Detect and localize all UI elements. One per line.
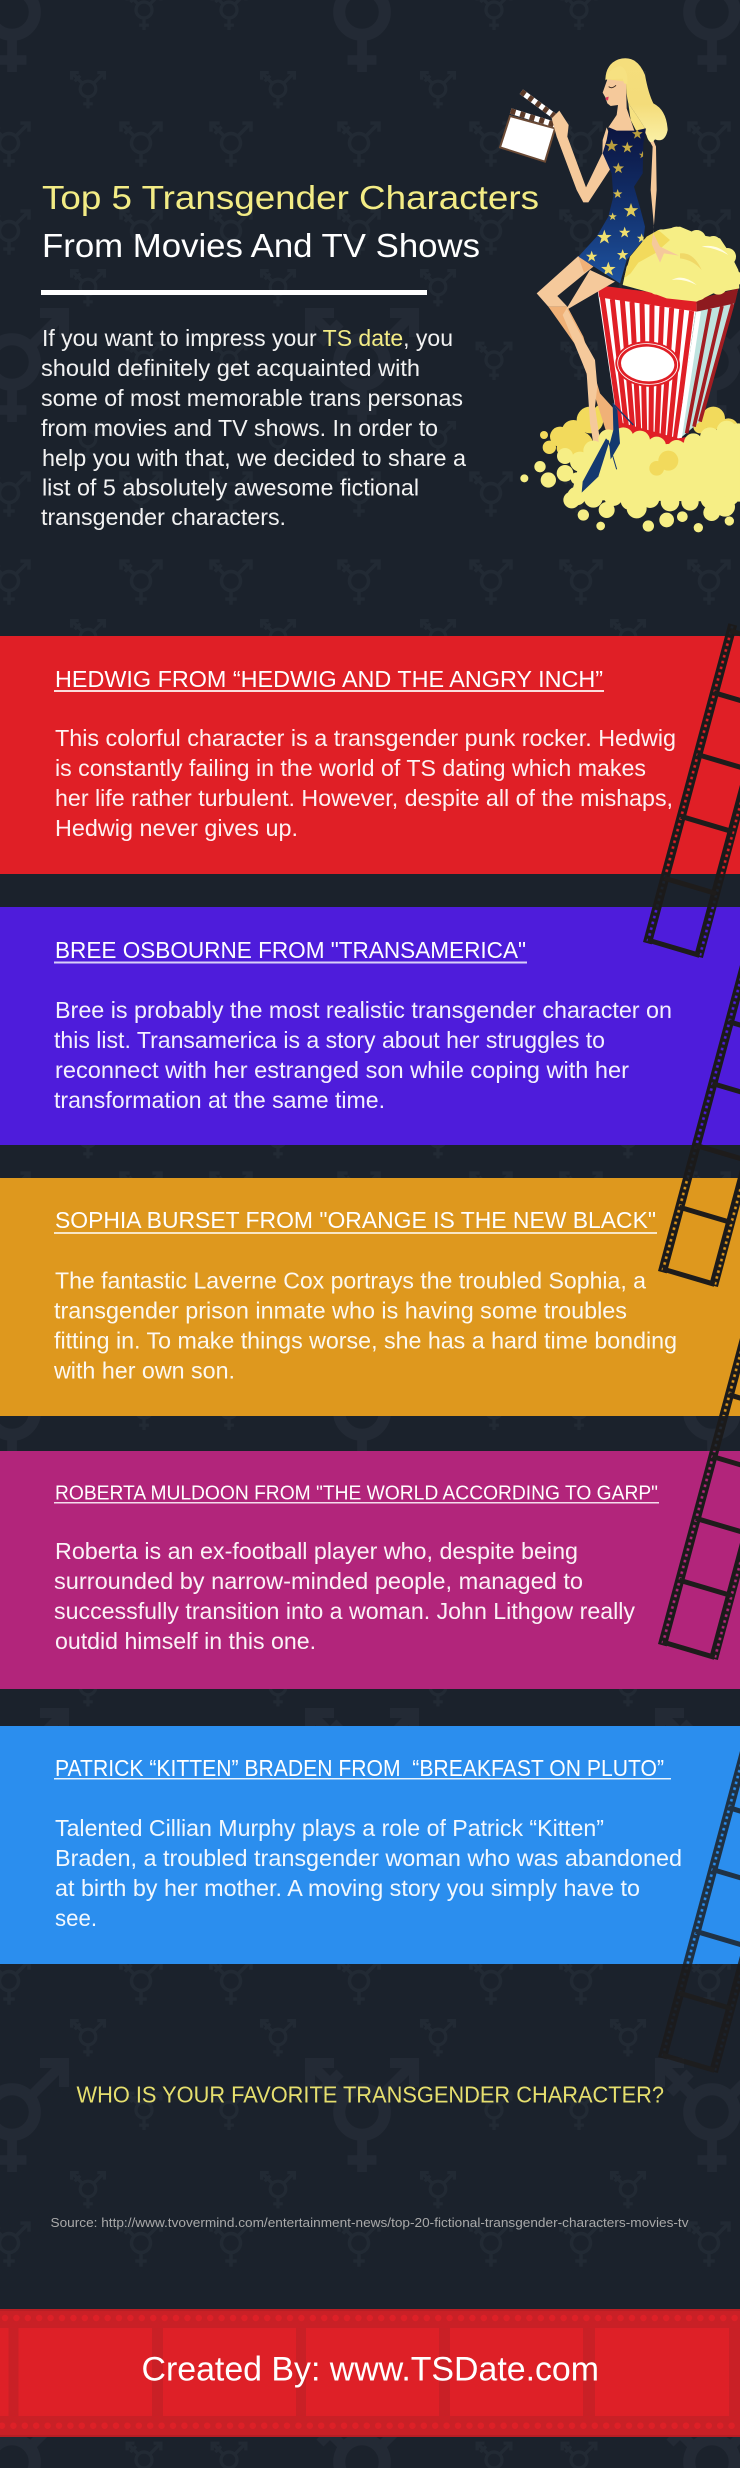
film strip 3 bbox=[658, 1325, 740, 1661]
text: Hedwig: her life rather turbulent. However, despite all of the mishaps, bbox=[55, 785, 673, 811]
text: Bree Osbourne: this list. Transamerica is a story about her struggles to bbox=[54, 1027, 605, 1053]
text: Roberta Muldoon: surrounded by narrow-minded people, managed to bbox=[54, 1568, 583, 1594]
text: Patrick Kitten Braden: Talented Cillian Murphy plays a role of Patrick “Kitten” bbox=[55, 1815, 604, 1841]
front leg bbox=[563, 270, 615, 453]
text: Roberta Muldoon bbox=[54, 1538, 635, 1654]
text: Patrick Kitten Braden: see. bbox=[55, 1905, 97, 1931]
footer credit: Created By: www.TSDate.com bbox=[142, 2351, 599, 2389]
clapperboard bbox=[500, 92, 559, 162]
heading: Roberta Muldoon: ROBERTA MULDOON FROM "THE WORLD ACCORDING TO GARP" bbox=[55, 1482, 658, 1505]
intro paragraph: should definitely get acquainted with bbox=[41, 355, 420, 381]
text: Patrick Kitten Braden: at birth by her mother. A moving story you simply have to bbox=[55, 1875, 640, 1901]
shoes bbox=[582, 403, 633, 493]
text: Bree Osbourne: Bree is probably the most realistic transgender character on bbox=[55, 997, 672, 1023]
panel: Roberta Muldoon bbox=[0, 1451, 740, 1689]
title divider bar bbox=[41, 290, 427, 295]
intro paragraph: transgender characters. bbox=[41, 504, 286, 530]
text: Bree Osbourne bbox=[54, 997, 672, 1113]
film strip 1 bbox=[643, 623, 740, 959]
source line: Source: http://www.tvovermind.com/entertainment-news/top-20-fictional-transgender-characters-movies-tv bbox=[50, 2215, 689, 2230]
popcorn pile behind box bbox=[540, 405, 738, 458]
text: Bree Osbourne: reconnect with her estranged son while coping with her bbox=[55, 1057, 629, 1083]
illustration: woman sitting on popcorn with clapperboard bbox=[500, 58, 740, 532]
intro paragraph: some of most memorable trans personas bbox=[41, 385, 463, 411]
panel: Bree Osbourne bbox=[0, 907, 740, 1145]
panel: Patrick Kitten Braden bbox=[0, 1726, 740, 1964]
title: From Movies And TV Shows bbox=[42, 228, 480, 265]
intro paragraph: list of 5 absolutely awesome fictional bbox=[42, 474, 419, 500]
intro paragraph: help you with that, we decided to share a bbox=[42, 445, 467, 471]
intro paragraph: from movies and TV shows. In order to bbox=[41, 415, 438, 441]
text: Bree Osbourne: transformation at the same time. bbox=[54, 1087, 385, 1113]
intro paragraph: If you want to impress your TS date, you bbox=[42, 325, 453, 351]
text: Patrick Kitten Braden bbox=[55, 1815, 682, 1931]
heading: Bree Osbourne: BREE OSBOURNE FROM "TRANSAMERICA" bbox=[55, 937, 526, 963]
back arm bbox=[643, 128, 679, 263]
heading: Hedwig: HEDWIG FROM “HEDWIG AND THE ANGRY INCH” bbox=[55, 666, 603, 692]
dress stars bbox=[586, 128, 646, 276]
panel: Sophia Burset bbox=[0, 1178, 740, 1416]
dress bbox=[578, 127, 646, 283]
title bbox=[42, 180, 539, 265]
back thigh bbox=[537, 256, 593, 307]
text: Hedwig bbox=[55, 725, 676, 841]
text: Sophia Burset: The fantastic Laverne Cox portrays the troubled Sophia, a bbox=[55, 1268, 647, 1294]
text: Hedwig: is constantly failing in the world of TS dating which makes bbox=[55, 755, 646, 781]
text: Sophia Burset bbox=[53, 1268, 677, 1384]
raised arm bbox=[552, 111, 612, 202]
heading: Sophia Burset: SOPHIA BURSET FROM "ORANGE IS THE NEW BLACK" bbox=[55, 1207, 656, 1233]
text: Hedwig: This colorful character is a transgender punk rocker. Hedwig bbox=[55, 725, 676, 751]
title: Top 5 Transgender Characters bbox=[42, 180, 539, 217]
text: Patrick Kitten Braden: Braden, a troubled transgender woman who was abandoned bbox=[55, 1845, 682, 1871]
closing question: WHO IS YOUR FAVORITE TRANSGENDER CHARACTER? bbox=[76, 2082, 664, 2108]
text: Hedwig: Hedwig never gives up. bbox=[55, 815, 298, 841]
text: Sophia Burset: transgender prison inmate who is having some troubles bbox=[54, 1298, 627, 1324]
text: Roberta Muldoon: successfully transition into a woman. John Lithgow really bbox=[54, 1598, 635, 1624]
film strip 4 bbox=[658, 1738, 740, 2074]
back shin bbox=[548, 307, 617, 448]
text: Roberta Muldoon: Roberta is an ex-football player who, despite being bbox=[55, 1538, 578, 1564]
heading: Patrick Kitten Braden: PATRICK “KITTEN” BRADEN FROM “BREAKFAST ON PLUTO” bbox=[55, 1755, 664, 1781]
hair bbox=[605, 58, 668, 142]
popcorn box bbox=[597, 285, 738, 446]
text: Roberta Muldoon: outdid himself in this one. bbox=[55, 1628, 316, 1654]
panel: Hedwig bbox=[0, 636, 740, 874]
text: Sophia Burset: fitting in. To make things worse, she has a hard time bonding bbox=[54, 1328, 677, 1354]
intro paragraph bbox=[41, 325, 467, 530]
woman bbox=[537, 58, 679, 453]
text: Sophia Burset: with her own son. bbox=[53, 1358, 235, 1384]
footer film banner bbox=[0, 2309, 740, 2437]
popcorn pile front bbox=[520, 421, 740, 532]
popcorn top bbox=[623, 227, 740, 302]
neck and face bbox=[603, 79, 635, 133]
film strip 2 bbox=[658, 952, 740, 1288]
